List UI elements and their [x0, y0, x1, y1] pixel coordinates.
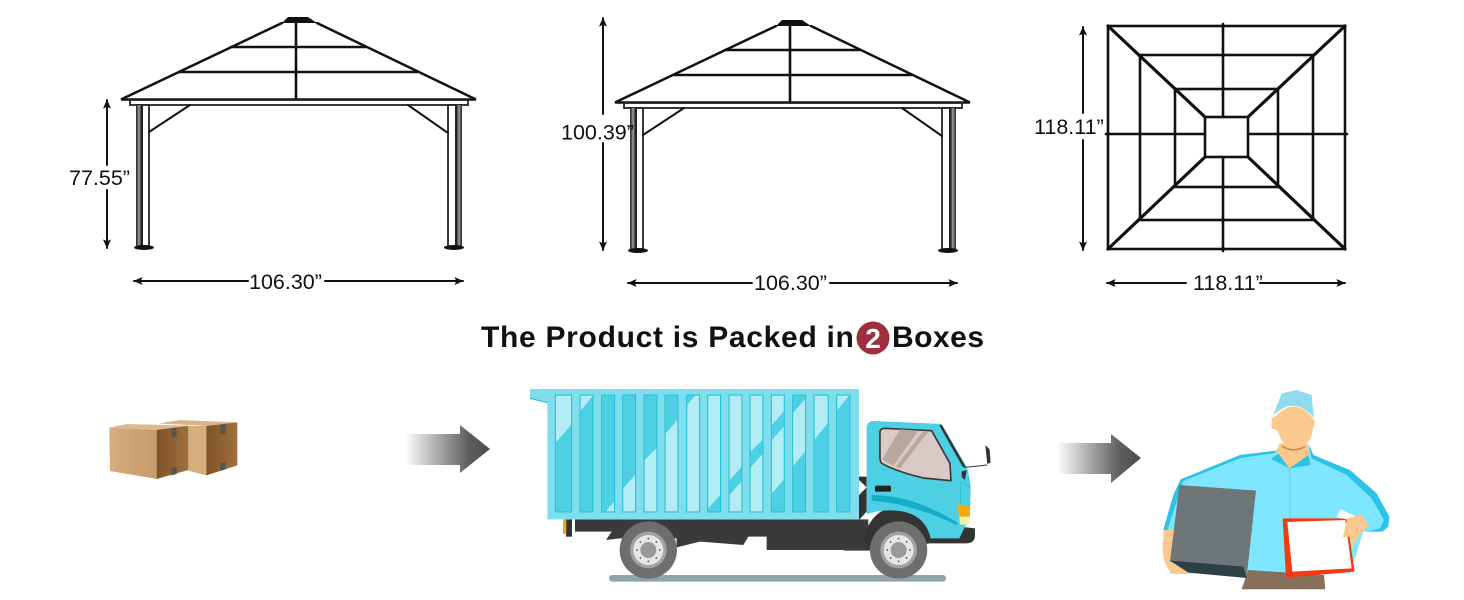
- grey box: [1170, 485, 1256, 577]
- heading end word: Boxes: [892, 321, 985, 354]
- arrow: boxes to truck: [405, 425, 490, 473]
- rear wheel: [620, 521, 677, 579]
- icon: two cardboard boxes: [109, 420, 237, 479]
- front wheel: [870, 521, 927, 579]
- dimension arrow: width: [628, 282, 957, 284]
- illustration: delivery truck: [530, 389, 991, 582]
- cargo box: [530, 389, 859, 519]
- dimension arrow: overall height: [602, 18, 604, 250]
- headlight: [957, 504, 970, 517]
- dimension arrow: depth: [1082, 27, 1084, 250]
- cab window: [880, 428, 951, 481]
- label: 118.11 inches horizontal: 118.11”: [1193, 271, 1263, 295]
- badge: number 2: 2: [865, 323, 881, 354]
- truck cab: [867, 421, 991, 538]
- hand: [1343, 514, 1369, 548]
- label: 100.39 inches: 100.39”: [561, 120, 634, 144]
- ground shadow: [609, 575, 946, 582]
- face: [1272, 407, 1315, 448]
- arrow: truck to recipient: [1057, 434, 1141, 483]
- door handle: [875, 486, 891, 492]
- gazebo side elevation: overall height: [561, 18, 969, 295]
- wing mirror: [962, 445, 991, 480]
- front wheel arch and bumper: [865, 506, 975, 551]
- gazebo top plan view: [1034, 24, 1347, 295]
- trousers: [1242, 570, 1325, 589]
- badge: number 2: [856, 322, 890, 354]
- chassis: [575, 519, 870, 551]
- illustration: delivery person with box and clipboard: [1163, 390, 1389, 589]
- neck: [1276, 443, 1309, 468]
- label: 106.30 inches: 106.30”: [249, 270, 322, 294]
- clipboard: [1283, 518, 1355, 578]
- label: 106.30 inches: 106.30”: [754, 271, 827, 295]
- label: 77.55 inches: 77.55”: [69, 166, 130, 190]
- collar: [1271, 453, 1311, 468]
- gazebo side elevation: eave height: [69, 17, 475, 294]
- arm holding box: [1163, 530, 1188, 574]
- dimension arrow: eave height: [106, 100, 108, 248]
- shirt: [1163, 443, 1389, 573]
- heading: packed in 2 boxes: The Product is Packed in: [481, 321, 855, 354]
- dimension arrow: width: [134, 280, 463, 282]
- dimension arrow: width: [1107, 282, 1345, 284]
- cap: [1273, 390, 1314, 418]
- label: 118.11 inches vertical: 118.11”: [1034, 115, 1104, 139]
